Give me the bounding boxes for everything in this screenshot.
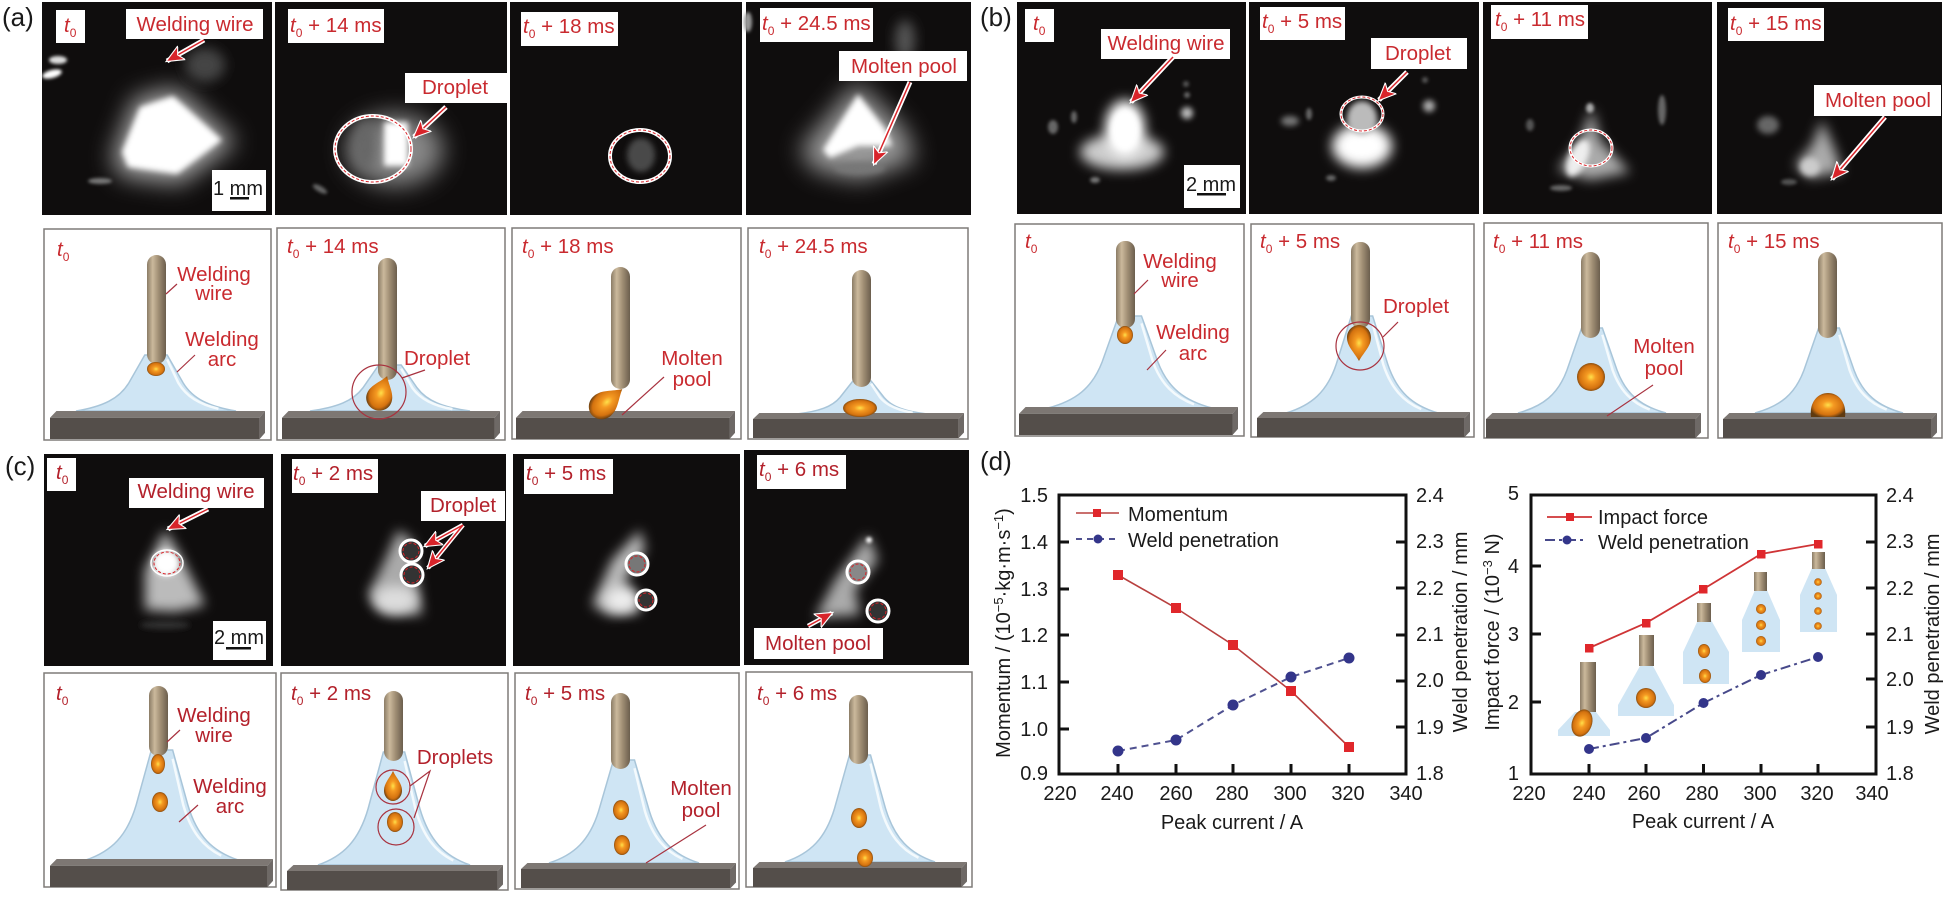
scale bar 2 mm: 2 mm xyxy=(214,627,264,649)
schematic a3: t0 + 18 ms: pool xyxy=(673,368,711,391)
inset: arc at 240 A xyxy=(1558,662,1610,740)
schematic a1: t0: Welding xyxy=(185,328,259,351)
schematic c2: t0 + 2 ms: Droplets xyxy=(417,746,493,769)
schematic a2: t0 + 14 ms: Droplet xyxy=(404,347,470,370)
photo c1: t0 welding wire: 0 xyxy=(62,473,69,487)
photo c1: t0 welding wire: t xyxy=(56,461,63,484)
photo a1: t0 welding wire: Welding wire xyxy=(137,13,253,36)
photo a2: t0 + 14 ms droplet: Droplet xyxy=(422,76,488,99)
left axis tick labels: 1.4 xyxy=(1020,532,1048,554)
left axis tick labels: 1.0 xyxy=(1020,719,1048,741)
schematic b1: t0: Welding xyxy=(1156,321,1230,344)
photo a2: t0 + 14 ms droplet: 0 xyxy=(296,26,303,40)
schematic a3: t0 + 18 ms: + 18 ms xyxy=(534,235,614,258)
left axis tick labels: 2 xyxy=(1508,692,1519,714)
photo b1: t0 welding wire: 0 xyxy=(1039,24,1046,38)
legend: Weld penetration xyxy=(1128,530,1279,552)
right axis tick labels: 2.2 xyxy=(1886,578,1914,600)
photo a1: t0 welding wire: 0 xyxy=(70,26,77,40)
right axis tick labels xyxy=(1416,485,1444,785)
photo a2: t0 + 14 ms droplet: t xyxy=(290,14,297,37)
legend: Weld penetration xyxy=(1598,532,1749,554)
photo c1: t0 welding wire: Welding wire xyxy=(138,480,254,503)
left axis tick labels: 3 xyxy=(1508,624,1519,646)
x axis tick labels: 300 xyxy=(1273,783,1307,805)
photo b4: t0 + 15 ms molten pool: Molten pool xyxy=(1825,89,1931,112)
left axis title: ·kg·m·s xyxy=(993,530,1015,597)
schematic b2: t0 + 5 ms: + 5 ms xyxy=(1272,230,1340,253)
arrow: to welding wire xyxy=(168,509,208,529)
schematic a2: t0 + 14 ms: + 14 ms xyxy=(299,235,379,258)
left axis title: −1 xyxy=(991,515,1006,530)
arrow: to welding wire xyxy=(1131,57,1173,102)
schematic a1: t0: arc xyxy=(208,348,236,371)
left axis title: N) xyxy=(1482,533,1504,560)
right axis tick labels: 2.4 xyxy=(1886,485,1914,507)
right axis title: Weld penetration / mm xyxy=(1450,532,1472,732)
right axis tick labels: 1.9 xyxy=(1886,717,1914,739)
inset: arc at 260 A xyxy=(1618,635,1674,716)
left axis title: Momentum / (10 xyxy=(993,612,1015,758)
x axis tick labels: 300 xyxy=(1743,783,1777,805)
left axis tick labels: 5 xyxy=(1508,483,1519,505)
right axis tick labels xyxy=(1886,485,1914,785)
right axis tick labels: 2.3 xyxy=(1886,531,1914,553)
schematic b3: t0 + 11 ms: + 11 ms xyxy=(1505,230,1583,253)
arrow: to welding wire xyxy=(167,40,204,61)
series: impact force xyxy=(1585,540,1822,652)
photo c4: t0 + 6 ms molten pool: 0 xyxy=(765,470,772,484)
photo b4: t0 + 15 ms molten pool: + 15 ms xyxy=(1742,12,1822,35)
schematic c4: t0 + 6 ms xyxy=(746,672,972,887)
left axis tick labels: 1 xyxy=(1508,763,1519,785)
photo b3: t0 + 11 ms: 0 xyxy=(1501,20,1508,34)
schematic a2: t0 + 14 ms: 0 xyxy=(293,247,300,261)
series: momentum xyxy=(1113,570,1354,752)
schematic c4: t0 + 6 ms: 0 xyxy=(763,694,770,708)
scale bar 2 mm xyxy=(213,621,266,660)
photo a2: t0 + 14 ms droplet xyxy=(275,2,507,215)
photo c2: t0 + 2 ms droplets: Droplet xyxy=(430,494,496,517)
photo b4: t0 + 15 ms molten pool xyxy=(1717,2,1942,214)
photo b1: t0 welding wire xyxy=(1017,2,1246,214)
arrow: to molten pool xyxy=(1832,117,1885,179)
schematic b4: t0 + 15 ms: 0 xyxy=(1734,242,1741,256)
left axis tick labels: 0.9 xyxy=(1020,763,1048,785)
schematic a4: t0 + 24.5 ms: 0 xyxy=(765,247,772,261)
schematic b1: t0: wire xyxy=(1160,269,1199,292)
schematic b3: t0 + 11 ms: pool xyxy=(1645,357,1683,380)
photo c3: t0 + 5 ms: t xyxy=(526,462,533,485)
photo a3: t0 + 18 ms: + 18 ms xyxy=(535,15,615,38)
x axis title: Peak current / A xyxy=(1632,811,1775,833)
left axis title: −3 xyxy=(1480,560,1495,575)
scale bar 2 mm: 2 mm xyxy=(1186,174,1236,196)
x axis tick labels: 320 xyxy=(1800,783,1834,805)
scale bar 2 mm xyxy=(1184,165,1240,208)
inset: arc at 300 A xyxy=(1742,572,1780,652)
right axis tick labels: 2.1 xyxy=(1886,624,1914,646)
left axis tick labels: 1.1 xyxy=(1020,672,1048,694)
x axis tick labels: 340 xyxy=(1855,783,1889,805)
left axis tick labels xyxy=(1508,483,1519,785)
schematic a1: t0: Welding xyxy=(177,263,251,286)
photo a1: t0 welding wire xyxy=(41,2,272,215)
schematic b4: t0 + 15 ms: + 15 ms xyxy=(1740,230,1820,253)
legend xyxy=(1545,507,1749,554)
arrow: to molten pool xyxy=(874,82,910,164)
schematic a1: t0 xyxy=(44,229,271,440)
arrow: to droplet xyxy=(1379,72,1407,100)
panel label (d): (d) xyxy=(980,446,1012,476)
x axis tick labels: 220 xyxy=(1512,783,1546,805)
photo b2: t0 + 5 ms droplet: t xyxy=(1262,10,1269,33)
schematic c4: t0 + 6 ms: + 6 ms xyxy=(769,682,837,705)
photo b2: t0 + 5 ms droplet: + 5 ms xyxy=(1274,10,1342,33)
left axis tick labels: 1.5 xyxy=(1020,485,1048,507)
photo c4: t0 + 6 ms molten pool: Molten pool xyxy=(765,632,871,655)
photo c3: t0 + 5 ms: 0 xyxy=(532,474,539,488)
schematic c3: t0 + 5 ms: Molten xyxy=(670,777,732,800)
schematic a4: t0 + 24.5 ms xyxy=(748,228,968,439)
panel label (a): (a) xyxy=(2,2,34,32)
photo c3: t0 + 5 ms xyxy=(513,454,740,666)
left axis tick labels: 1.2 xyxy=(1020,625,1048,647)
scale bar 1 mm xyxy=(212,170,266,211)
left axis title: Impact force / (10 xyxy=(1482,575,1504,731)
schematic a1: t0: wire xyxy=(194,282,233,305)
photo c4: t0 + 6 ms molten pool: t xyxy=(759,458,766,481)
x axis tick labels: 220 xyxy=(1043,783,1077,805)
right axis tick labels: 2.3 xyxy=(1416,531,1444,553)
schematic b4: t0 + 15 ms: t xyxy=(1728,230,1735,253)
photo b3: t0 + 11 ms: + 11 ms xyxy=(1507,8,1585,31)
photo a4: t0 + 24.5 ms molten pool: Molten pool xyxy=(851,55,957,78)
right axis tick labels: 2.1 xyxy=(1416,624,1444,646)
photo a1: t0 welding wire: t xyxy=(64,14,71,37)
schematic c1: t0: 0 xyxy=(62,694,69,708)
schematic a3: t0 + 18 ms: 0 xyxy=(528,247,535,261)
photo b2: t0 + 5 ms droplet: 0 xyxy=(1268,22,1275,36)
schematic b2: t0 + 5 ms xyxy=(1251,224,1474,437)
schematic c2: t0 + 2 ms: + 2 ms xyxy=(303,682,371,705)
photo a4: t0 + 24.5 ms molten pool xyxy=(744,2,971,215)
x axis tick labels: 280 xyxy=(1215,783,1249,805)
photo a2: t0 + 14 ms droplet: + 14 ms xyxy=(302,14,382,37)
x axis tick labels xyxy=(1512,783,1889,805)
schematic a3: t0 + 18 ms: t xyxy=(522,235,529,258)
x axis tick labels: 320 xyxy=(1331,783,1365,805)
x axis tick labels: 260 xyxy=(1627,783,1661,805)
schematic a2: t0 + 14 ms xyxy=(277,228,505,440)
photo a3: t0 + 18 ms: t xyxy=(523,15,530,38)
right axis tick labels: 2.0 xyxy=(1886,669,1914,691)
arrow: to droplet xyxy=(414,107,446,137)
left axis tick labels: 4 xyxy=(1508,556,1519,578)
schematic c1: t0: wire xyxy=(194,724,233,747)
x axis tick labels: 240 xyxy=(1572,783,1606,805)
schematic c2: t0 + 2 ms xyxy=(281,673,508,890)
photo b4: t0 + 15 ms molten pool: t xyxy=(1730,12,1737,35)
inset: arc at 280 A xyxy=(1683,603,1729,684)
schematic a3: t0 + 18 ms xyxy=(512,228,741,439)
schematic b3: t0 + 11 ms: 0 xyxy=(1499,242,1506,256)
scale bar 1 mm: 1 mm xyxy=(213,178,263,200)
schematic c1: t0: t xyxy=(56,682,63,705)
schematic b3: t0 + 11 ms: t xyxy=(1493,230,1500,253)
schematic b2: t0 + 5 ms: Droplet xyxy=(1383,295,1449,318)
left axis tick labels xyxy=(1020,485,1048,785)
arrow: to molten pool xyxy=(808,613,832,626)
photo b3: t0 + 11 ms xyxy=(1483,2,1712,214)
right axis tick labels: 2.0 xyxy=(1416,670,1444,692)
photo b3: t0 + 11 ms: t xyxy=(1495,8,1502,31)
photo a4: t0 + 24.5 ms molten pool: t xyxy=(762,12,769,35)
schematic b1: t0: arc xyxy=(1179,342,1207,365)
right axis tick labels: 1.8 xyxy=(1886,763,1914,785)
schematic b2: t0 + 5 ms: 0 xyxy=(1266,242,1273,256)
schematic c3: t0 + 5 ms: t xyxy=(525,682,532,705)
x axis tick labels: 240 xyxy=(1100,783,1134,805)
legend: Momentum xyxy=(1128,504,1228,526)
schematic c3: t0 + 5 ms: + 5 ms xyxy=(537,682,605,705)
schematic c2: t0 + 2 ms: t xyxy=(291,682,298,705)
photo c4: t0 + 6 ms molten pool: + 6 ms xyxy=(771,458,839,481)
schematic a2: t0 + 14 ms: t xyxy=(287,235,294,258)
schematic a1: t0: 0 xyxy=(63,250,70,264)
schematic b1: t0 xyxy=(1015,224,1244,436)
schematic a4: t0 + 24.5 ms: + 24.5 ms xyxy=(771,235,868,258)
right axis title: Weld penetration / mm xyxy=(1922,534,1944,734)
schematic c1: t0 xyxy=(44,673,276,887)
photo c2: t0 + 2 ms droplets: 0 xyxy=(299,474,306,488)
right axis tick labels: 1.9 xyxy=(1416,717,1444,739)
arrows: to droplets xyxy=(425,525,463,568)
x axis tick labels: 280 xyxy=(1685,783,1719,805)
legend: Impact force xyxy=(1598,507,1708,529)
right axis tick labels: 2.2 xyxy=(1416,578,1444,600)
photo c1: t0 welding wire xyxy=(44,454,273,666)
schematic c1: t0: arc xyxy=(216,795,244,818)
schematic c3: t0 + 5 ms: pool xyxy=(682,799,720,822)
photo b2: t0 + 5 ms droplet xyxy=(1249,2,1479,214)
schematic b1: t0: 0 xyxy=(1031,242,1038,256)
x axis tick labels xyxy=(1043,783,1423,805)
schematic a4: t0 + 24.5 ms: t xyxy=(759,235,766,258)
schematic b3: t0 + 11 ms xyxy=(1484,223,1708,438)
schematic c2: t0 + 2 ms: 0 xyxy=(297,694,304,708)
photo a4: t0 + 24.5 ms molten pool: + 24.5 ms xyxy=(774,12,871,35)
inset: arc at 320 A xyxy=(1800,552,1837,632)
left axis tick labels: 1.3 xyxy=(1020,579,1048,601)
photo b2: t0 + 5 ms droplet: Droplet xyxy=(1385,42,1451,65)
schematic a1: t0: t xyxy=(57,238,64,261)
panel label (b): (b) xyxy=(980,2,1012,32)
schematic b3: t0 + 11 ms: Molten xyxy=(1633,335,1695,358)
schematic c3: t0 + 5 ms: 0 xyxy=(531,694,538,708)
schematic c3: t0 + 5 ms xyxy=(515,673,739,889)
photo b1: t0 welding wire: t xyxy=(1033,12,1040,35)
photo c4: t0 + 6 ms molten pool xyxy=(744,450,969,665)
photo c2: t0 + 2 ms droplets xyxy=(281,454,506,666)
photo a3: t0 + 18 ms xyxy=(510,2,742,215)
series: weld penetration xyxy=(1584,652,1823,754)
x axis tick labels: 340 xyxy=(1389,783,1423,805)
series: weld penetration xyxy=(1112,652,1354,756)
schematic c1: t0: Welding xyxy=(193,775,267,798)
chart: impact force and weld penetration vs peak current xyxy=(1480,483,1944,833)
schematic b1: t0: t xyxy=(1025,230,1032,253)
photo b1: t0 welding wire: Welding wire xyxy=(1108,32,1224,55)
chart: momentum and weld penetration vs peak current xyxy=(991,485,1472,834)
right axis tick labels: 1.8 xyxy=(1416,763,1444,785)
photo a4: t0 + 24.5 ms molten pool: 0 xyxy=(768,24,775,38)
photo c3: t0 + 5 ms: + 5 ms xyxy=(538,462,606,485)
photo a3: t0 + 18 ms: 0 xyxy=(529,27,536,41)
right axis tick labels: 2.4 xyxy=(1416,485,1444,507)
photo c2: t0 + 2 ms droplets: + 2 ms xyxy=(305,462,373,485)
photo c2: t0 + 2 ms droplets: t xyxy=(293,462,300,485)
x axis title: Peak current / A xyxy=(1161,812,1304,834)
legend xyxy=(1076,504,1279,552)
schematic c1: t0: Welding xyxy=(177,704,251,727)
schematic c4: t0 + 6 ms: t xyxy=(757,682,764,705)
photo b4: t0 + 15 ms molten pool: 0 xyxy=(1736,24,1743,38)
left axis title: −5 xyxy=(991,597,1006,612)
left axis title: ) xyxy=(993,508,1015,515)
x axis tick labels: 260 xyxy=(1159,783,1193,805)
schematic b4: t0 + 15 ms xyxy=(1718,223,1942,438)
panel label (c): (c) xyxy=(5,451,35,481)
schematic a3: t0 + 18 ms: Molten xyxy=(661,347,723,370)
schematic b1: t0: Welding xyxy=(1143,250,1217,273)
schematic b2: t0 + 5 ms: t xyxy=(1260,230,1267,253)
